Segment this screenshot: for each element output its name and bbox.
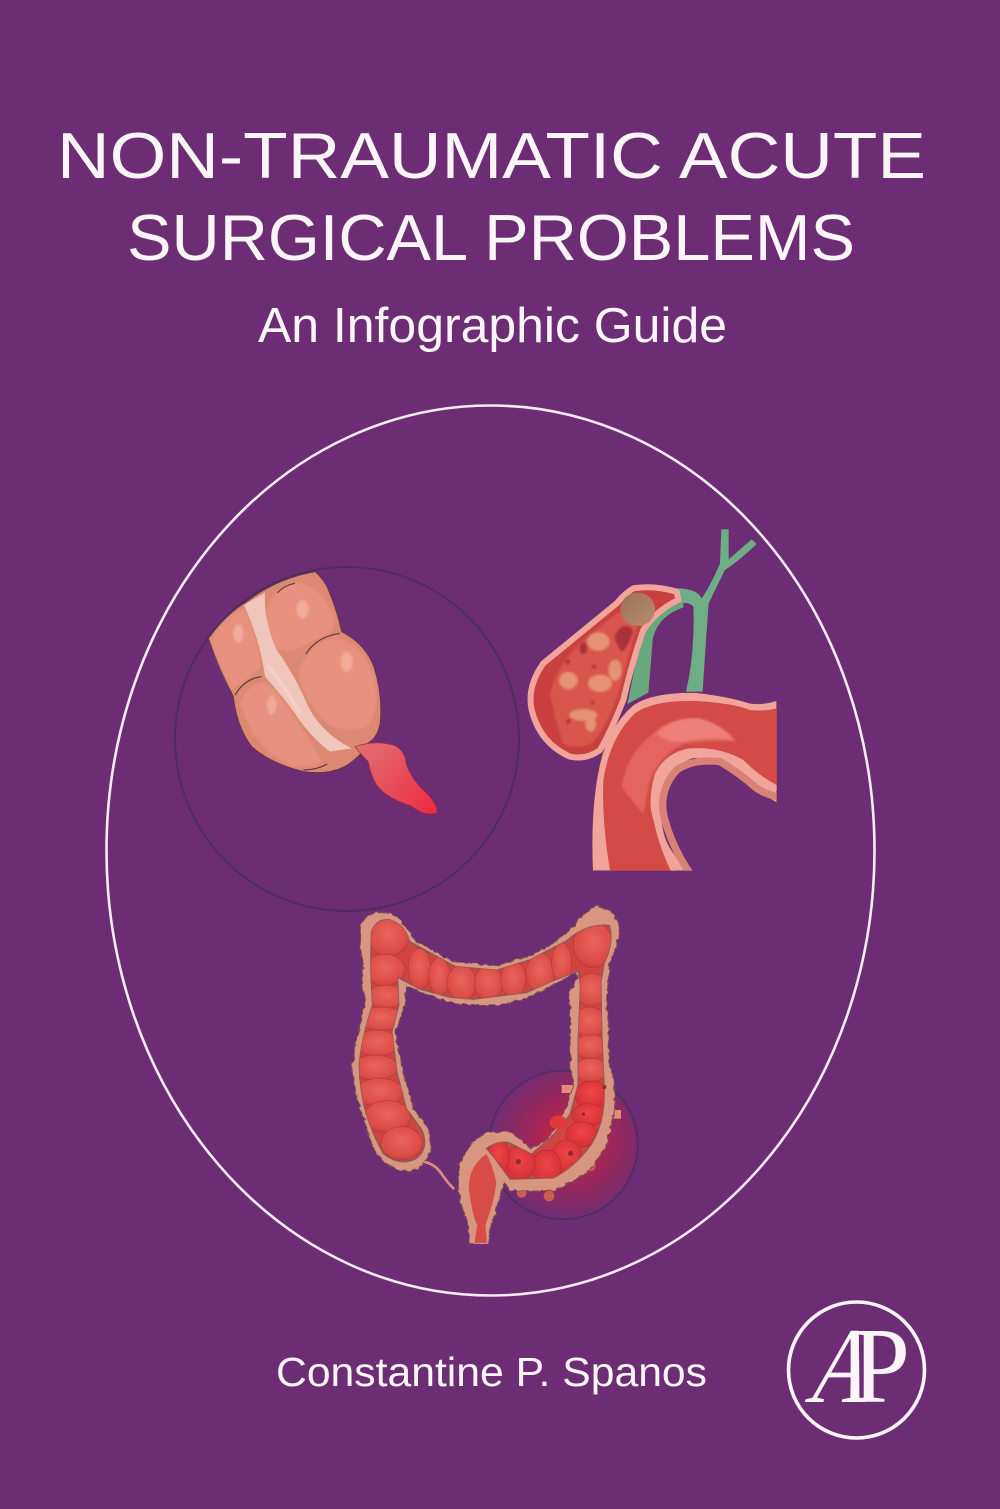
title: SURGICAL PROBLEMS [127, 201, 855, 274]
title [57, 119, 926, 274]
inflamed bulge [550, 1116, 567, 1129]
rectum [468, 1153, 497, 1243]
gallbladder [531, 587, 678, 757]
appendix [355, 743, 437, 814]
logo letters: A [797, 1306, 894, 1426]
diverticula [517, 1085, 621, 1201]
gallbladder dark spots [565, 626, 633, 724]
title: NON-TRAUMATIC ACUTE [57, 119, 926, 192]
diverticula openings [516, 1085, 606, 1164]
cecum lobes [212, 583, 376, 766]
large outer ellipse [106, 406, 874, 1296]
bile ducts [627, 529, 757, 704]
gallbladder lining [550, 613, 637, 747]
taenia band [244, 593, 352, 752]
duodenum [592, 693, 777, 871]
publisher logo [788, 1302, 924, 1438]
thin circle frame [175, 567, 519, 911]
author name: Constantine P. Spanos [276, 1349, 707, 1395]
subtitle: An Infographic Guide [258, 299, 727, 353]
duodenum wall fold [654, 751, 778, 873]
illustration: gallbladder with stone, bile ducts and duodenum [531, 529, 778, 873]
haustral creases [235, 583, 340, 770]
inflammation circle [489, 1071, 638, 1219]
cecum body [208, 572, 381, 773]
haustra: inflamed sigmoid [487, 1081, 608, 1183]
appendix tail [423, 1162, 453, 1188]
duodenum highlight [622, 719, 737, 813]
gallbladder patches [559, 632, 622, 732]
logo letters: P [852, 1307, 910, 1426]
illustration: colon with diverticulitis [352, 906, 638, 1243]
logo ring [788, 1302, 924, 1438]
haustra: ascending and transverse [352, 917, 613, 1183]
colon outer wall [352, 906, 620, 1243]
gallstone [620, 593, 655, 626]
lobe highlights [233, 600, 353, 714]
colon inner lumen [359, 920, 611, 1179]
duodenum lumen [603, 701, 777, 871]
illustration: cecum and inflamed appendix [175, 567, 519, 911]
